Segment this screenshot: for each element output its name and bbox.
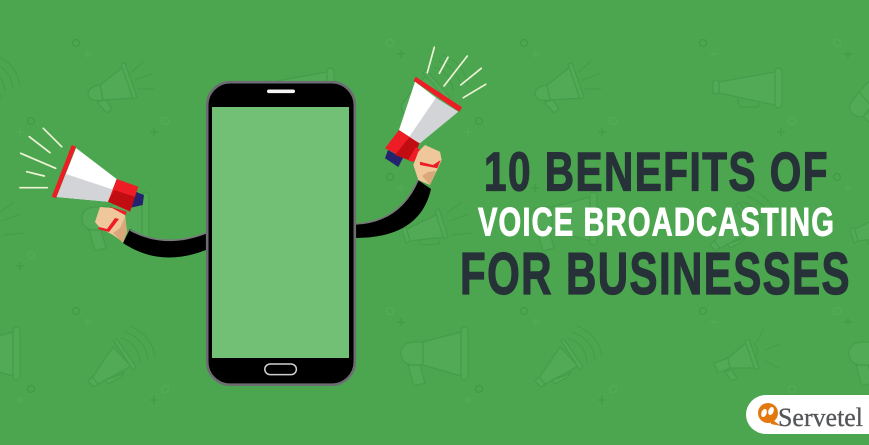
right megaphone: [385, 77, 462, 167]
right sleeve highlight: [355, 180, 418, 224]
phone speaker: [267, 90, 295, 93]
sound rays right: [427, 47, 486, 98]
phone body: [207, 82, 355, 385]
left megaphone: [52, 145, 144, 216]
logo pill: [746, 395, 869, 434]
smartphone: [207, 82, 355, 385]
icon: speech bubble: [758, 403, 781, 426]
title: [460, 140, 851, 307]
logo: Servetel: [746, 395, 869, 434]
phone screen: [212, 107, 349, 358]
sound rays left: [20, 128, 62, 188]
left sleeve: [123, 229, 206, 258]
left arm with megaphone: [20, 128, 206, 258]
right arm with megaphone: [355, 47, 486, 238]
phone home button: [265, 364, 296, 375]
right hand: [413, 145, 442, 185]
logo wordmark: Servetel: [778, 403, 863, 432]
right sleeve: [355, 180, 431, 238]
left sleeve highlight: [130, 230, 206, 240]
left hand: [95, 207, 127, 243]
